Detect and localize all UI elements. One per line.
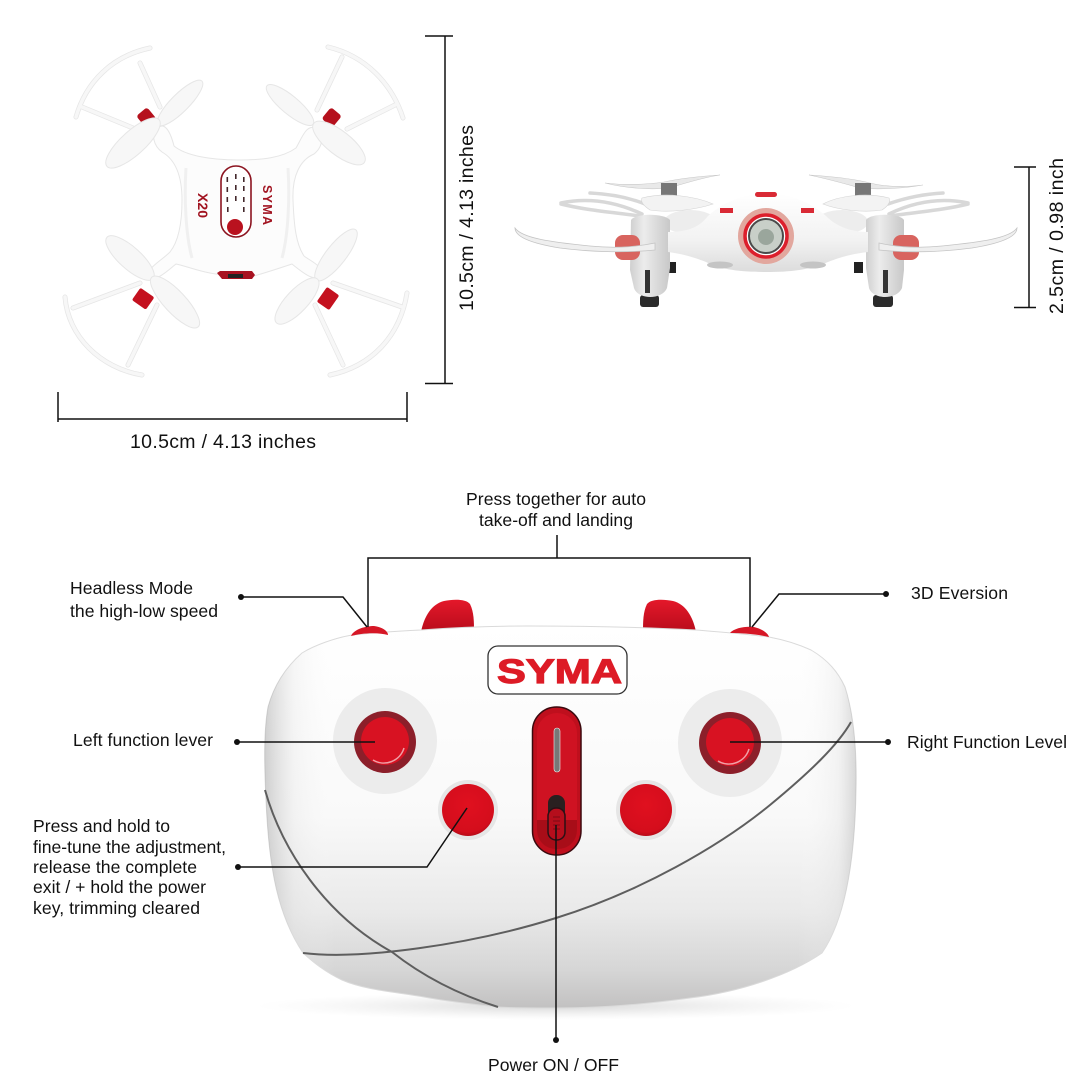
propellers: [99, 75, 372, 334]
controller shell: [265, 626, 856, 1008]
top rotor blades: [605, 175, 923, 189]
battery cover: [221, 166, 251, 237]
camera: [217, 271, 255, 279]
callout: trim button: release the complete: [33, 857, 197, 877]
motors: [615, 235, 640, 260]
callout: left function lever: [73, 730, 375, 750]
logo badge: [488, 646, 627, 694]
callout: auto take-off: [368, 489, 750, 627]
callout: right function level: Right Function Level: [907, 732, 1067, 752]
callout: trim button: exit / + hold the power: [33, 877, 206, 897]
ground shadow: [256, 992, 856, 1020]
callout: trim button: fine-tune the adjustment,: [33, 837, 226, 857]
right stick: [678, 689, 782, 797]
power button: [227, 219, 243, 235]
central body: [668, 193, 868, 272]
callout: power switch: [488, 825, 619, 1075]
callout: right function level: [730, 732, 1067, 752]
camera ring: [738, 208, 794, 264]
dimension: side-view height: 2.5cm / 0.98 inch: [1046, 158, 1068, 314]
callout: auto take-off: Press together for auto: [466, 489, 646, 509]
motors: [132, 107, 342, 310]
callout: trim button: key, trimming cleared: [33, 898, 200, 918]
trim button right: [616, 780, 676, 840]
left stick: [333, 688, 437, 794]
dimension: top-view height: 10.5cm / 4.13 inches: [456, 125, 478, 311]
dimension: top-view height: [425, 36, 478, 384]
feet: [640, 295, 659, 307]
dimension: top-view width: 10.5cm / 4.13 inches: [130, 431, 316, 453]
lower guards: [515, 228, 655, 252]
power slot: [532, 707, 581, 855]
small shoulder buttons: [351, 626, 388, 636]
callout: auto take-off: take-off and landing: [479, 510, 633, 530]
brand mark: SYMA: [260, 185, 274, 225]
callout: 3D eversion: 3D Eversion: [911, 583, 1008, 603]
model mark: X20: [195, 193, 211, 218]
lower rotor petals: [641, 195, 713, 211]
top-view drone: [65, 47, 407, 375]
callout: power switch: Power ON / OFF: [488, 1055, 619, 1075]
propeller guards: [65, 47, 407, 375]
rear feet: [669, 262, 676, 273]
dimension: top-view width: [58, 392, 407, 453]
callout: headless mode: the high-low speed: [70, 601, 218, 621]
callout: trim button: [33, 808, 467, 918]
callout: headless mode: Headless Mode: [70, 578, 193, 598]
callout: trim button: Press and hold to: [33, 816, 170, 836]
callout: headless mode: [70, 578, 367, 627]
callout: left function lever: Left function lever: [73, 730, 213, 750]
legs: [630, 215, 670, 297]
shell seams: [265, 722, 851, 1007]
callout: 3D eversion: [752, 583, 1008, 627]
drone body: [149, 126, 322, 278]
logo badge: SYMA: [497, 653, 622, 691]
rear arm lobes: [664, 210, 716, 234]
side-view drone: [515, 175, 1017, 307]
trim button left: [438, 780, 498, 840]
remote controller: [256, 600, 856, 1020]
shoulder buttons: [421, 600, 474, 632]
upper guards: [561, 193, 968, 216]
status marks: [720, 192, 814, 213]
dimension: side-view height: [1014, 158, 1068, 314]
